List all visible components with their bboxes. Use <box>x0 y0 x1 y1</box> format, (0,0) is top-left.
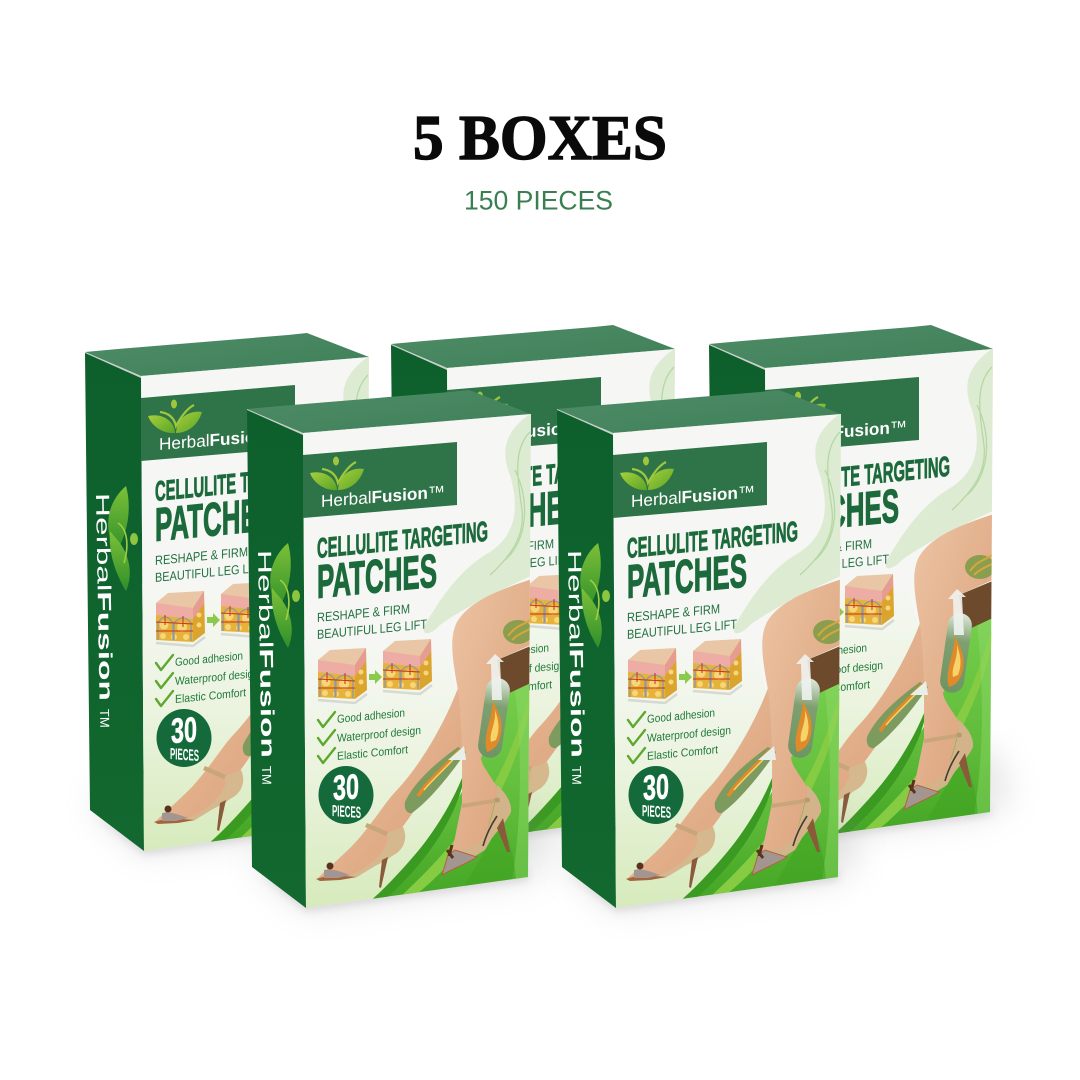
subheading: RESHAPE & FIRM <box>317 601 410 625</box>
brand name: HerbalFusion™ <box>159 425 283 454</box>
front panel <box>300 412 533 912</box>
feature 2: Waterproof design <box>337 725 421 745</box>
feature 2: Waterproof design <box>481 660 565 680</box>
subheading line 2: BEAUTIFUL LEG LIFT <box>317 616 427 642</box>
title: 5 BOXES <box>413 102 667 173</box>
badge circle <box>318 766 374 824</box>
floor shadow <box>714 745 1014 847</box>
illustration: shoes <box>460 720 655 823</box>
brand band <box>141 385 295 461</box>
illustration: shoes <box>626 785 821 888</box>
heading line 2: PATCHES <box>779 479 899 543</box>
feature 3: Elastic Comfort <box>481 679 553 698</box>
side trademark: TM <box>569 766 584 785</box>
icon: arrow <box>207 613 220 627</box>
brand band <box>613 442 767 518</box>
icon: side leaf logo <box>580 543 610 648</box>
badge number: 30 <box>333 767 359 808</box>
box: back left: PIECES <box>170 746 199 765</box>
icon: skin after <box>845 574 894 629</box>
icon: check marks <box>780 647 797 698</box>
feature 1: Good adhesion <box>175 650 243 669</box>
feature 1: Good adhesion <box>799 642 867 661</box>
front panel <box>762 347 995 847</box>
icon: side leaf logo <box>108 486 138 591</box>
subheading line 2: BEAUTIFUL LEG LIFT <box>155 559 265 585</box>
box: front left: PIECES <box>332 803 361 822</box>
badge number: 30 <box>643 767 669 808</box>
floor shadow <box>252 810 552 912</box>
front panel <box>610 412 843 912</box>
icon: leaf logo <box>310 456 364 490</box>
side brand name: Herbal Fusion <box>91 493 116 701</box>
box: back right: PIECES <box>794 738 823 757</box>
feature 2: Waterproof design <box>175 668 259 688</box>
icon: skin after <box>693 639 742 694</box>
icon: leaf logo <box>454 392 508 425</box>
feature 3: Elastic Comfort <box>799 679 871 698</box>
box: back left <box>85 333 390 855</box>
side panel <box>391 345 452 843</box>
feature 1: Good adhesion <box>647 707 715 726</box>
illustration: legs with patches <box>628 578 845 878</box>
subheading line 2: BEAUTIFUL LEG LIFT <box>627 616 737 642</box>
brand name: HerbalFusion™ <box>783 417 907 446</box>
badge circle <box>462 701 518 759</box>
top flap <box>557 390 841 436</box>
heading line 2: PATCHES <box>627 544 747 608</box>
icon: leaf logo <box>772 392 826 425</box>
feature 1: Good adhesion <box>481 642 549 661</box>
icon: check marks <box>318 712 335 763</box>
illustration: legs with patches <box>780 513 997 813</box>
icon: side leaf logo <box>270 543 300 648</box>
badge circle <box>628 766 684 824</box>
brand name: HerbalFusion™ <box>465 417 589 446</box>
side brand name: Herbal Fusion <box>563 550 588 758</box>
heading line 1: CELLULITE TARGETING <box>317 516 488 564</box>
icon: check marks <box>462 647 479 698</box>
heading line 1: CELLULITE TARGETING <box>461 451 632 499</box>
box: back centre <box>391 325 696 847</box>
illustration: shoes <box>154 728 349 831</box>
badge circle <box>156 709 212 767</box>
floor shadow <box>90 753 390 855</box>
floor shadow <box>396 745 696 847</box>
icon: skin before <box>156 591 205 646</box>
illustration: legs with patches <box>318 578 535 878</box>
side trademark: TM <box>259 766 274 785</box>
floor shadow <box>562 810 862 912</box>
box: back centre: PIECES <box>476 738 505 757</box>
icon: arrow <box>831 605 844 619</box>
feature 2: Waterproof design <box>647 725 731 745</box>
feature 3: Elastic Comfort <box>337 744 409 763</box>
feature 3: Elastic Comfort <box>175 687 247 706</box>
brand name: HerbalFusion™ <box>321 482 445 511</box>
top flap <box>709 325 993 371</box>
illustration: legs with patches <box>462 513 679 813</box>
icon: skin after <box>383 639 432 694</box>
side brand name: Herbal Fusion <box>253 550 278 758</box>
brand band <box>447 377 601 453</box>
box: back right <box>709 325 1014 847</box>
heading line 1: CELLULITE TARGETING <box>155 459 326 507</box>
icon: skin before <box>462 583 511 638</box>
subheading: RESHAPE & FIRM <box>461 536 554 560</box>
icon: check marks <box>628 712 645 763</box>
icon: skin after <box>221 582 270 637</box>
heading line 2: PATCHES <box>461 479 581 543</box>
box: front right <box>557 390 862 912</box>
icon: check marks <box>156 655 173 706</box>
subtitle: 150 PIECES <box>464 186 613 216</box>
top flap <box>391 325 675 371</box>
subheading line 2: BEAUTIFUL LEG LIFT <box>779 551 889 577</box>
heading line 1: CELLULITE TARGETING <box>627 516 798 564</box>
icon: arrow <box>513 605 526 619</box>
box: front left <box>247 390 552 912</box>
box: front right: PIECES <box>642 803 671 822</box>
illustration: shoes <box>316 785 511 888</box>
icon: arrow <box>369 670 382 684</box>
badge number: 30 <box>477 702 503 743</box>
icon: arrow <box>679 670 692 684</box>
brand band <box>303 442 457 518</box>
icon: skin before <box>780 583 829 638</box>
front panel <box>444 347 677 847</box>
feature 2: Waterproof design <box>799 660 883 680</box>
subheading: RESHAPE & FIRM <box>779 536 872 560</box>
badge circle <box>780 701 836 759</box>
icon: skin before <box>318 648 367 703</box>
badge number: 30 <box>171 710 197 751</box>
side panel <box>85 353 146 851</box>
badge number: 30 <box>795 702 821 743</box>
side panel <box>557 410 618 908</box>
front panel <box>138 355 371 855</box>
side trademark: TM <box>97 709 112 728</box>
heading line 2: PATCHES <box>155 487 275 551</box>
subheading line 2: BEAUTIFUL LEG LIFT <box>461 551 571 577</box>
side panel <box>247 410 308 908</box>
feature 1: Good adhesion <box>337 707 405 726</box>
brand band <box>765 377 919 453</box>
side panel <box>709 345 770 843</box>
subheading: RESHAPE & FIRM <box>155 544 248 568</box>
top flap <box>247 390 531 436</box>
subheading: RESHAPE & FIRM <box>627 601 720 625</box>
top flap <box>85 333 369 379</box>
icon: skin after <box>527 574 576 629</box>
illustration: shoes <box>778 720 973 823</box>
illustration: legs with patches <box>156 521 373 821</box>
heading line 2: PATCHES <box>317 544 437 608</box>
icon: leaf logo <box>620 456 674 490</box>
feature 3: Elastic Comfort <box>647 744 719 763</box>
icon: leaf logo <box>148 400 202 433</box>
icon: skin before <box>628 648 677 703</box>
brand name: HerbalFusion™ <box>631 482 755 511</box>
